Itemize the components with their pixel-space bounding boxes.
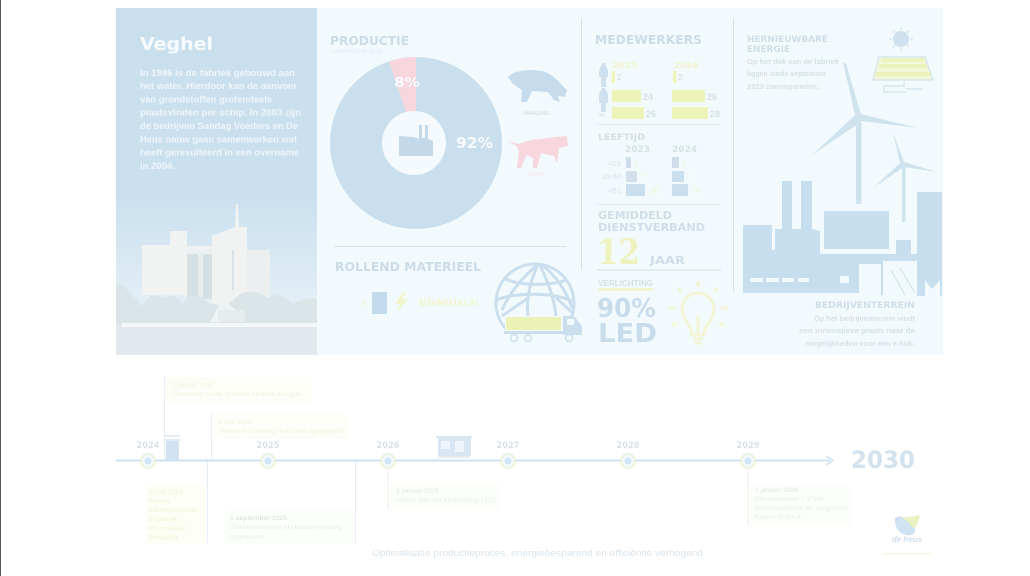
text block: solar: 2023 zonnepanelen. [747,82,819,91]
text block: verlichting: VERLICHTING [598,279,653,288]
panel: main background [317,8,943,355]
text block: history: plaatsvinden per schip. In 2003 zijn [140,108,301,118]
panel: hernieuwbare energie: ENERGIE [747,45,790,55]
bar chart: leeftijd: >51 [608,186,621,195]
callout: 1 januari 2029 [748,468,851,526]
icon: large wind turbine [812,62,918,204]
callout: 2024 detail: warmtewisselaar [148,507,198,514]
panel: productie [330,33,568,229]
icon: cow [508,136,568,178]
callout: 1 januari 2026: 100% van de verlichting LED [396,497,496,504]
year labels: 2025 [256,441,280,451]
bar chart: employees: 2024 [674,61,699,70]
callout: 1 mei 2024: Nieuwe koeling machine geplaatst [219,428,344,435]
callout: 1 januari 2026 [388,468,499,510]
text block: solar: liggen sinds september [747,69,826,78]
panel: rollend materieel: > [361,299,366,308]
panel: rollend materieel [335,260,582,342]
timeline [116,376,915,544]
year labels: 2028 [616,441,640,451]
text block: bedrijventerrein: mogelijkheden voor een e-hub. [805,339,915,348]
callout: 1 september 2025: 1 september 2025 [230,515,287,522]
callout: 1 mei 2024: 1 mei 2024 [219,419,252,426]
text block: dienstverband: GEMIDDELD [598,210,672,222]
year labels: 2024 [136,441,160,451]
bar chart: employees: 28 [710,109,720,119]
icon: pig: VARKENS [523,111,549,117]
heading: Veghel: Veghel [140,34,213,55]
bar chart: leeftijd: 7 [641,174,645,181]
icon: light bulb [668,281,728,343]
footer note: Optimalisatie productieproces, energiebesparend en efficiëntie verhogend [372,548,703,559]
icon: bin [164,436,181,460]
callout: 2024 detail: 15 juli 2024 [149,489,183,496]
text block: verlichting: LED [598,319,657,349]
callout: 1 januari 2024: 1 januari 2024 [172,382,214,389]
pie chart: 92% [456,134,493,152]
year labels [136,441,760,451]
text block: verlichting [597,279,657,349]
heading: medewerkers: MEDEWERKERS [595,32,702,47]
callout: 1 mei 2024 [212,414,348,438]
panel: hernieuwbare energie [743,27,942,348]
text block: history [140,68,301,171]
callout: 2024 detail: voor energie [149,525,186,532]
text block: history: het water. Hierdoor kan de aanvoer [140,81,298,91]
bar chart: leeftijd: 16 [692,188,700,195]
bar chart: leeftijd: <29 [608,159,621,168]
icon: battery [372,292,387,314]
bar chart: leeftijd: 1 [635,161,639,168]
callout: 1 september 2025 [225,510,353,544]
bar chart: leeftijd: 16 [650,188,658,195]
text block: history: In 1986 is de fabriek gebouwd aan [140,68,295,78]
text block: dienstverband: DIENSTVERBAND [598,222,705,234]
callout: 1 januari 2024: Overstap naar groene stroom en gas [172,391,303,398]
callout: 1 september 2025: Zonnepanelen en batterijopslag [230,524,342,531]
callout: 1 januari 2024 [165,377,312,402]
bar chart: leeftijd: 7 [687,174,691,181]
panel: Veghel intro [116,8,317,355]
logo: de heus: de heus [892,535,923,544]
icon: globe with truck [496,264,582,342]
bar chart: leeftijd [598,133,700,196]
year nodes [141,454,755,468]
text block: dienstverband: JAAR [649,255,685,267]
callout stems [164,376,356,543]
heading: hernieuwbare energie: HERNIEUWBARE [747,35,828,45]
bar chart: leeftijd: 1 [683,161,687,168]
text block: bedrijventerrein: BEDRIJVENTERREIN [815,301,915,311]
callout: 1 januari 2026: 1 januari 2026 [396,488,439,495]
year labels: 2026 [376,441,400,451]
text block: dienstverband: 12 [597,232,640,273]
heading: productie: PRODUCTIE [330,33,409,48]
callout: 2024 detail: Nieuwe [149,498,171,505]
callout: 1 januari 2029: Ketens 1t 3 = 4 [755,514,801,521]
text block: bedrijventerrein: Op het bedrijventerrein vindt [814,314,915,323]
logo: de heus [883,515,931,554]
text block: solar: Op het dak van de fabriek [747,57,840,66]
callout: 1 september 2025: opgeleverd [230,534,264,541]
bar chart: leeftijd: LEEFTIJD [598,133,645,143]
subtitle: Jaarproductie 2023 [331,49,383,55]
callout: 1 januari 2029: 1 januari 2029 [755,487,798,494]
icon: factory [399,125,433,156]
text block: verlichting: 90% [597,294,656,324]
bar chart: leeftijd: 30-50 [602,172,621,181]
icon: small wind turbine [873,132,937,222]
text block: history: Heus nauw gaan samenwerken wat [140,134,297,144]
label: elektrisch: Elektrisch [419,297,478,309]
callout: 1 januari 2029: Biomassaketel en vergisters [755,505,848,512]
icon: bolt [395,292,408,312]
icon: sun [889,27,913,51]
bar chart: employees: 2023 [612,61,638,70]
text block: bedrijventerrein [799,301,915,348]
pie chart: 8% [394,76,420,91]
bar chart: employees [598,61,720,119]
callout: 2024 detail: in gebruik [149,516,178,523]
callout: 1 januari 2029: Alle producten + 17kW [755,496,824,503]
bar chart: employees: 2 [617,72,622,82]
pie chart [330,57,502,229]
icon: solar panel [873,57,933,92]
bar chart: employees: 2 [678,72,683,82]
panel: medewerkers [595,32,728,349]
bar chart: leeftijd: 2024 [672,145,697,155]
year labels: 2027 [496,441,520,451]
label: 2030: 2030 [851,446,915,474]
icon: pig [508,70,567,117]
heading: rollend materieel: ROLLEND MATERIEEL [335,260,481,274]
bar chart: employees: 26 [707,92,717,102]
text block: bedrijventerrein: een innovatieve plaats naar de [799,326,915,335]
bar chart: employees: 24 [643,92,653,102]
text block: history: in 2004. [140,161,175,171]
text block: history: van grondstoffen grotendeels [140,94,272,104]
year labels: 2029 [736,441,760,451]
callout: 2024 detail [146,486,206,544]
illustration: factory [743,181,942,296]
text block: history: de bedrijven Sandag Voeders en De [140,121,298,131]
icon: machine [436,436,472,457]
text block: solar [747,57,840,91]
bar chart: leeftijd: 2023 [625,145,650,155]
icon: cow: RUND [528,172,544,178]
bar chart: employees: tot. [598,112,607,119]
photo: factory by the water [116,204,317,355]
text block: dienstverband [597,210,705,273]
bar chart: employees: 26 [646,109,656,119]
text block: history: heeft geresulteerd in een overname [140,148,299,158]
axis line with arrow [116,456,833,465]
callout: 2024 detail: besparing [149,534,178,541]
